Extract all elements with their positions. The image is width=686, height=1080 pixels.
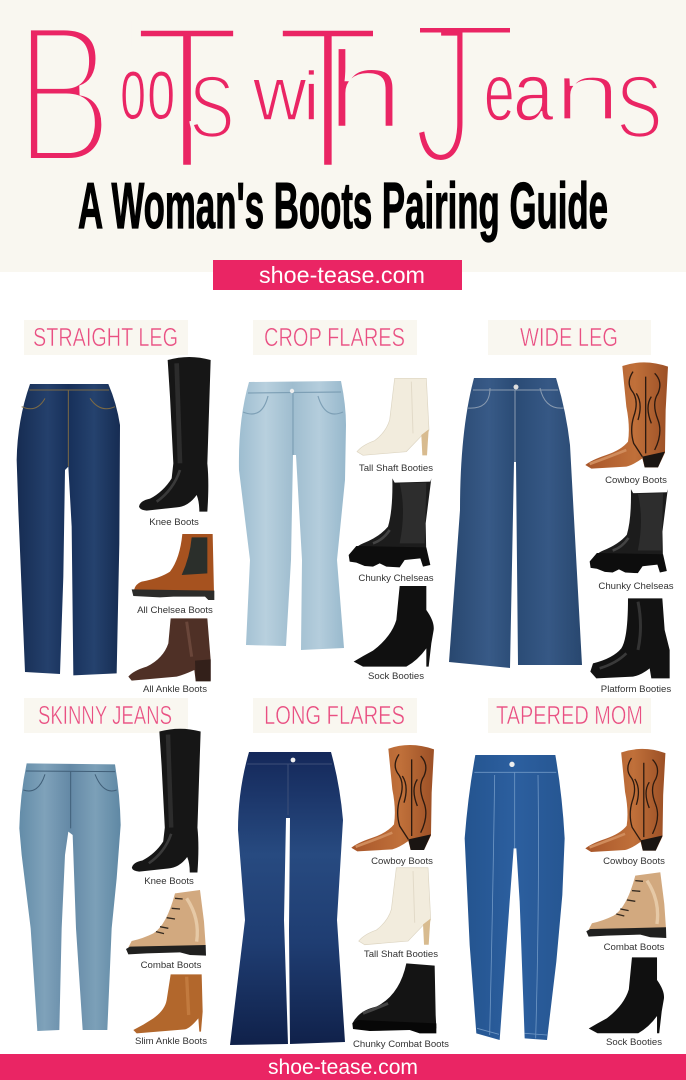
heading: tapered mom: TAPERED MOM	[496, 700, 643, 730]
icon: knee boot	[132, 729, 201, 873]
label: slim ankle boots: Slim Ankle Boots	[135, 1036, 207, 1047]
bottom website banner: shoe-tease.com	[268, 1055, 418, 1079]
heading: wide leg	[488, 320, 651, 355]
label: cowboy boots: Cowboy Boots	[603, 856, 665, 867]
title: Boots with Jeans: n	[554, 47, 621, 138]
panel: wide leg	[449, 320, 674, 695]
label: tall shaft booties: Tall Shaft Booties	[359, 463, 433, 474]
title: Boots with Jeans: e	[484, 46, 515, 138]
title: Boots with Jeans: o	[147, 39, 175, 139]
jeans: crop flares	[239, 381, 346, 650]
label: sock booties: Sock Booties	[606, 1037, 662, 1048]
icon: combat boot	[586, 872, 666, 938]
heading: straight leg	[24, 320, 188, 355]
heading: skinny jeans	[24, 698, 188, 733]
label: platform booties: Platform Booties	[601, 684, 671, 695]
label: chunky chelseas: Chunky Chelseas	[358, 573, 434, 584]
icon: sock bootie	[354, 586, 434, 667]
title: Boots with Jeans: a	[513, 47, 554, 138]
title: Boots with Jeans: o	[120, 39, 146, 139]
jeans: skinny	[19, 763, 121, 1031]
icon: platform bootie	[590, 598, 670, 678]
heading: crop flares	[253, 320, 417, 355]
top website banner: shoe-tease.com	[259, 262, 425, 288]
label: all ankle boots: All Ankle Boots	[143, 684, 207, 695]
label: sock booties: Sock Booties	[368, 671, 424, 682]
icon: tall shaft bootie	[357, 378, 429, 455]
panel: straight leg	[17, 320, 214, 695]
panel: tapered mom	[465, 698, 666, 1048]
heading: crop flares: CROP FLARES	[264, 322, 405, 352]
label: combat boots: Combat Boots	[141, 960, 202, 971]
label: chunky chelseas: Chunky Chelseas	[598, 581, 674, 592]
heading: wide leg: WIDE LEG	[520, 322, 618, 352]
panel: skinny jeans	[19, 698, 207, 1047]
label: all chelsea boots: All Chelsea Boots	[137, 605, 213, 616]
icon: combat boot	[126, 890, 206, 956]
jeans: wide leg	[449, 378, 582, 668]
label: cowboy boots: Cowboy Boots	[371, 856, 433, 867]
icon: cowboy boot	[351, 745, 434, 851]
label: combat boots: Combat Boots	[604, 942, 665, 953]
icon: chunky combat boot	[352, 963, 436, 1033]
icon: ankle boot	[128, 618, 211, 681]
title: Boots with Jeans: s	[616, 31, 664, 163]
label: chunky combat boots: Chunky Combat Boots	[353, 1039, 449, 1050]
heading: long flares: LONG FLARES	[264, 700, 405, 730]
icon: chelsea boot	[132, 534, 214, 600]
label: tall shaft booties: Tall Shaft Booties	[364, 949, 438, 960]
title: Boots with Jeans: s	[189, 31, 235, 164]
heading: long flares	[253, 698, 417, 733]
title: Boots with Jeans: w	[252, 52, 307, 137]
heading: straight leg: STRAIGHT LEG	[33, 322, 178, 352]
label: knee boots: Knee Boots	[149, 517, 199, 528]
title: Boots with Jeans: h	[326, 27, 404, 152]
icon: knee boot	[139, 357, 211, 512]
jeans: tapered mom	[465, 755, 565, 1040]
title: Boots with Jeans	[15, 0, 664, 215]
bottom website banner	[0, 1054, 686, 1080]
label: cowboy boots: Cowboy Boots	[605, 475, 667, 486]
top website banner	[213, 260, 462, 290]
heading: tapered mom	[488, 698, 651, 733]
icon: cowboy boot	[585, 362, 668, 469]
heading: skinny jeans: SKINNY JEANS	[38, 700, 172, 730]
icon: sock bootie	[589, 957, 664, 1033]
title: Boots with Jeans: i	[303, 57, 320, 135]
icon: tall shaft bootie	[359, 868, 431, 945]
label: knee boots: Knee Boots	[144, 876, 194, 887]
icon: chunky chelsea	[590, 489, 668, 573]
icon: slim ankle boot	[133, 974, 203, 1033]
panel: crop flares	[239, 320, 434, 682]
jeans: long flares	[230, 752, 345, 1045]
jeans: straight leg	[17, 384, 120, 675]
header band	[0, 0, 686, 272]
icon: chunky chelsea	[349, 478, 431, 567]
icon: cowboy boot	[585, 749, 665, 852]
panel: long flares	[230, 698, 449, 1050]
